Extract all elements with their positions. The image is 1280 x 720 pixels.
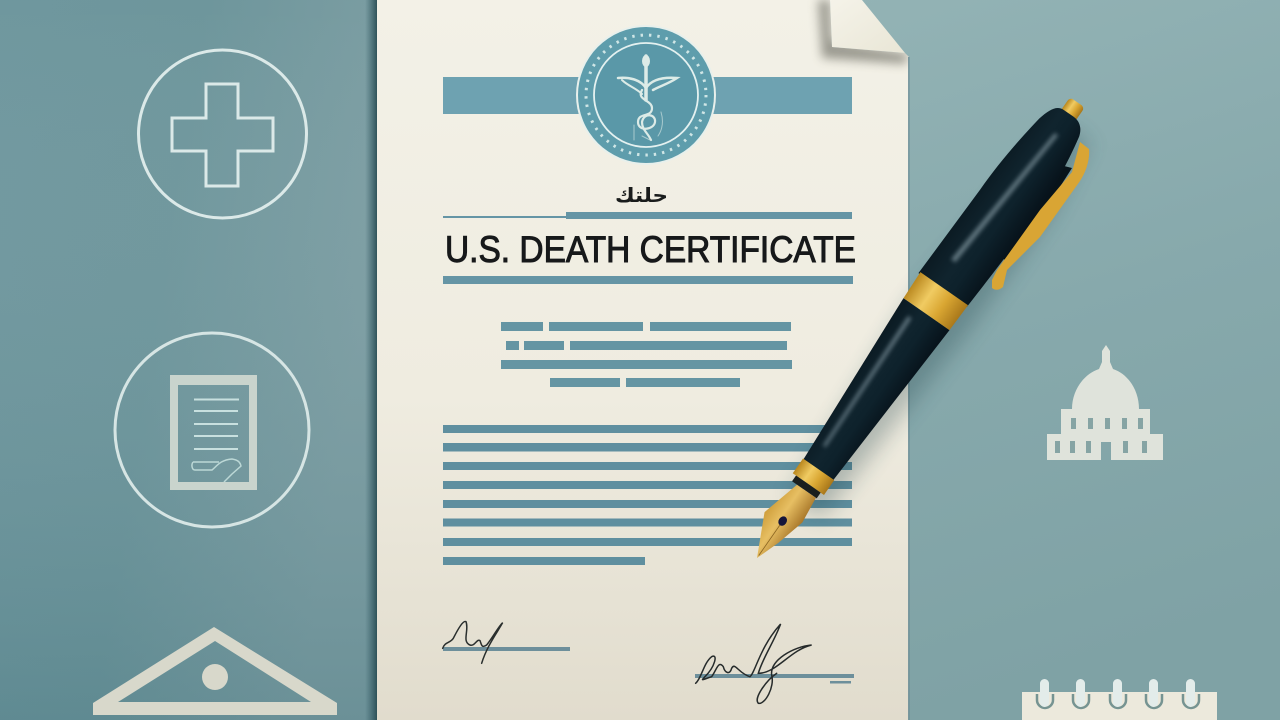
panel: certificate paper	[377, 0, 910, 720]
gold band	[903, 272, 968, 331]
icon: capitol building	[1047, 345, 1163, 460]
centered text placeholder lines	[501, 322, 792, 387]
barrel highlights	[820, 124, 1058, 455]
pen end finial	[1062, 98, 1084, 120]
nib	[757, 484, 816, 558]
upper barrel	[918, 108, 1080, 307]
icon: signed document in circle	[115, 333, 309, 527]
gold ring	[793, 458, 834, 495]
signature right	[695, 624, 854, 703]
icon: triangle with dot	[93, 627, 337, 715]
seal emblem	[576, 25, 716, 165]
right background panel	[825, 0, 1280, 720]
title: U.S. DEATH CERTIFICATE	[445, 229, 856, 270]
pen	[757, 98, 1092, 558]
icon: medical cross in circle	[138, 50, 306, 218]
rule below title	[443, 276, 853, 284]
lower barrel	[804, 298, 950, 480]
script text above title: حلتك	[615, 183, 668, 207]
pen clip	[992, 142, 1089, 290]
rule above title	[443, 212, 852, 219]
caduceus symbol	[618, 55, 677, 140]
body text placeholder lines	[443, 425, 852, 565]
icon: spiral calendar	[1022, 679, 1217, 720]
signature left	[443, 621, 570, 663]
page corner fold	[830, 0, 905, 53]
pen shadow	[781, 111, 1097, 527]
nib collar	[792, 476, 821, 498]
certificate header bars	[443, 77, 852, 114]
left background panel	[0, 0, 378, 720]
